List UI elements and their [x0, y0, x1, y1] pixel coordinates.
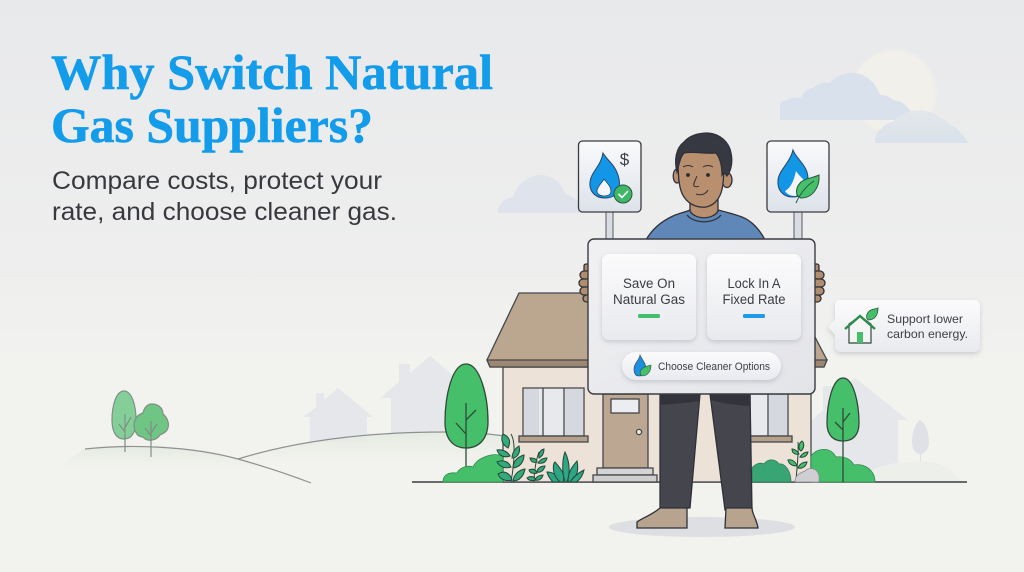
fern plants [497, 434, 547, 482]
face [678, 146, 724, 207]
callout: support lower carbon energy [828, 300, 980, 352]
door [593, 394, 657, 482]
cloud: large [780, 73, 913, 120]
background house right [810, 378, 908, 482]
icon: house with leaf [845, 308, 878, 343]
background tree right [912, 420, 929, 462]
right small bush [752, 460, 791, 482]
icon: flame with dollar and check: $ [620, 150, 630, 169]
callout: support lower carbon energy: Support lower [887, 312, 963, 326]
left window [519, 388, 588, 442]
sun [852, 50, 936, 134]
sign board held by person [588, 239, 815, 394]
torso [646, 210, 765, 240]
subtitle: rate, and choose cleaner gas. [52, 198, 397, 226]
card: save on natural gas: Save On [623, 276, 675, 291]
right sign board [767, 141, 829, 212]
right bush [811, 449, 875, 482]
subtitle [52, 167, 397, 226]
brows, nose and mouth [683, 166, 713, 195]
card: lock in a fixed rate [707, 254, 801, 340]
left tree [445, 364, 488, 482]
card: save on natural gas [602, 254, 696, 340]
right sign [767, 141, 829, 240]
left bush [443, 455, 503, 482]
card: save on natural gas: Natural Gas [613, 292, 685, 307]
title: Gas Suppliers? [51, 97, 373, 153]
title: Why Switch Natural [51, 44, 493, 100]
agave plant [547, 452, 584, 482]
neck [690, 192, 718, 218]
icon: flame with leaf [778, 150, 819, 203]
pill: choose cleaner options [622, 352, 781, 380]
eyes [686, 173, 690, 177]
hair [676, 133, 732, 176]
left hand [579, 264, 598, 302]
cloud: left [498, 175, 580, 213]
subtitle: Compare costs, protect your [52, 167, 382, 195]
pill: choose cleaner options: Choose Cleaner Options [658, 361, 770, 373]
house [487, 293, 827, 482]
left sign pole [606, 212, 613, 240]
title [51, 44, 493, 153]
background houses [303, 356, 480, 442]
right tree [827, 378, 859, 482]
person [579, 133, 825, 528]
house wall [503, 367, 811, 482]
right window [745, 394, 792, 442]
cloud: small [875, 110, 968, 143]
right leg [710, 394, 752, 510]
left shoe [637, 508, 687, 528]
right sign pole [794, 212, 802, 240]
left leg [660, 394, 700, 508]
small trees on hill [112, 391, 168, 457]
left ear [673, 169, 681, 183]
ground line [412, 481, 967, 483]
callout: support lower carbon energy: carbon energy. [887, 327, 968, 341]
card: lock in a fixed rate: Lock In A [728, 276, 780, 291]
left sign board [578, 141, 641, 212]
hills [40, 432, 962, 483]
right shoe [725, 508, 758, 528]
right fern [788, 441, 808, 482]
card: lock in a fixed rate: Fixed Rate [722, 292, 786, 307]
left sign [578, 141, 641, 240]
roof [487, 293, 827, 367]
right hand [806, 264, 825, 302]
right ear [722, 172, 732, 188]
rock [795, 469, 819, 482]
person shadow [609, 517, 795, 537]
